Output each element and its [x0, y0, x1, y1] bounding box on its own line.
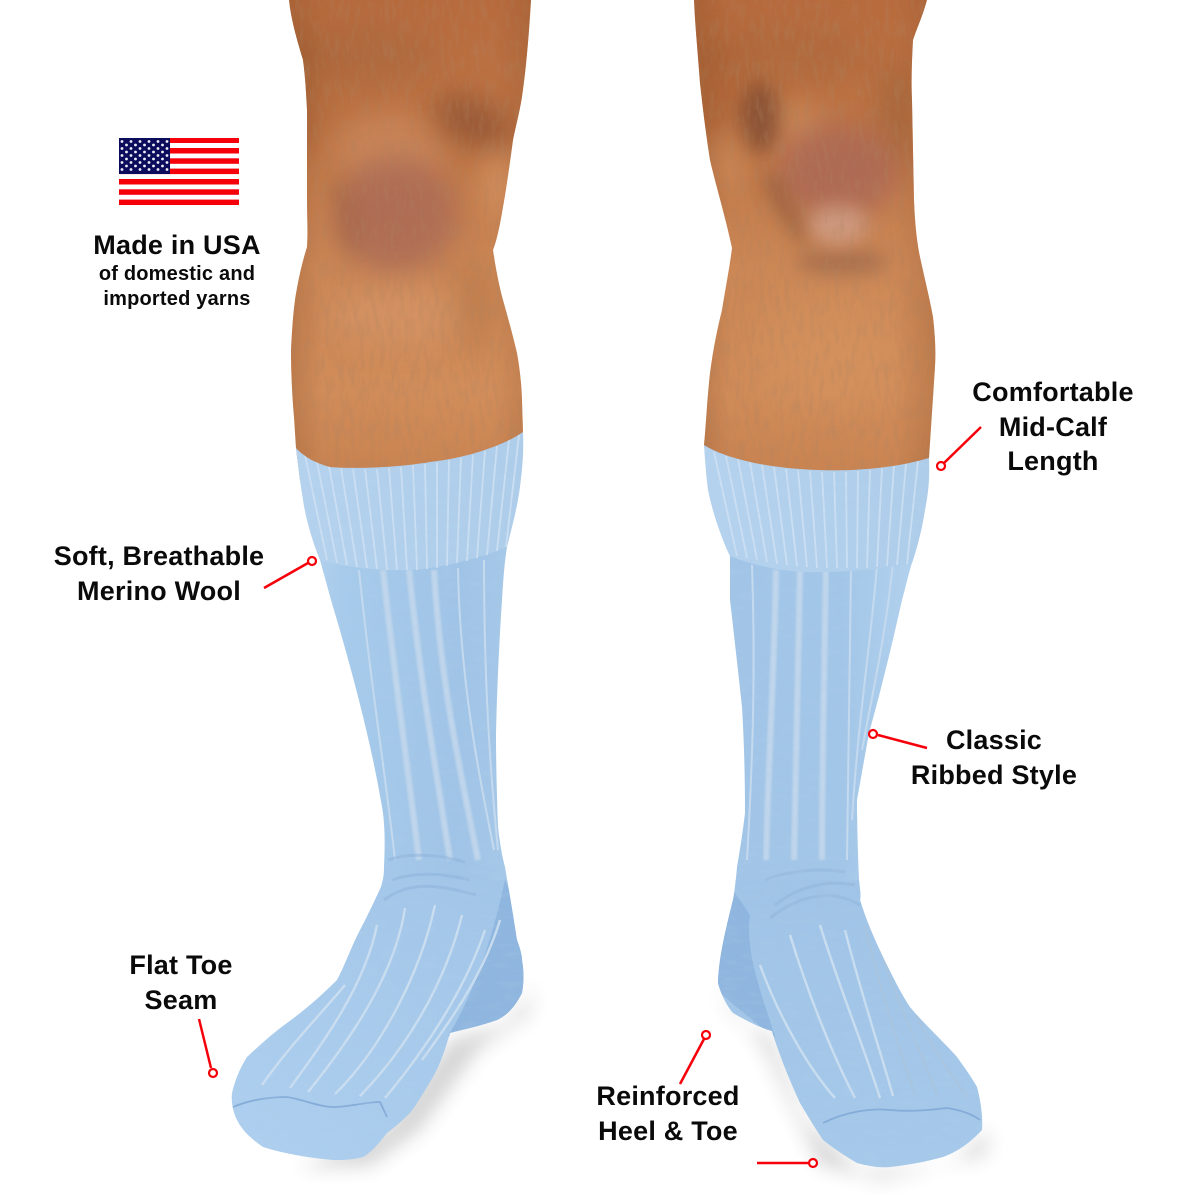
foot shadows [300, 975, 990, 1180]
ankle folds [384, 855, 476, 900]
callout: Classic Ribbed Style [869, 725, 1077, 790]
left leg [278, 0, 540, 490]
callout: Soft, Breathable Merino Wool: Merino Wool [77, 576, 241, 606]
cuff [700, 440, 940, 572]
toe seam [823, 1108, 980, 1123]
callout: Comfortable Mid-Calf Length: Mid-Calf [999, 412, 1108, 442]
callout: Flat Toe Seam [129, 950, 233, 1077]
heading: Made in USA [93, 230, 261, 310]
callout: Soft, Breathable Merino Wool [54, 541, 316, 606]
callout: Comfortable Mid-Calf Length: Length [1007, 446, 1099, 476]
heading: Made in USA: of domestic and [99, 263, 255, 285]
heading: Made in USA: Made in USA [93, 230, 261, 260]
heading: Made in USA: imported yarns [103, 288, 251, 310]
callout: Reinforced Heel & Toe [596, 1031, 817, 1167]
callout: Flat Toe Seam: Seam [145, 985, 217, 1015]
sock leg [723, 540, 919, 920]
foot ribs [262, 905, 500, 1098]
foot [710, 880, 990, 1170]
callout: Classic Ribbed Style: Ribbed Style [911, 760, 1077, 790]
left sock [225, 425, 530, 1170]
foot [225, 880, 530, 1170]
ribs [766, 570, 826, 860]
foot ribs [760, 925, 893, 1098]
sock leg [312, 540, 514, 920]
icon: US flag [119, 138, 239, 205]
toe seam [233, 1097, 387, 1117]
callout: Classic Ribbed Style: Classic [946, 725, 1042, 755]
callout: Flat Toe Seam: Flat Toe [129, 950, 233, 980]
callout: Reinforced Heel & Toe: Heel & Toe [598, 1116, 738, 1146]
ankle folds [765, 870, 860, 918]
right leg [690, 0, 940, 490]
callout: Soft, Breathable Merino Wool: Soft, Breathable [54, 541, 264, 571]
heel shade [448, 880, 530, 1036]
cuff [296, 432, 524, 570]
callout: Comfortable Mid-Calf Length: Comfortable [972, 377, 1134, 407]
right sock [700, 440, 990, 1170]
ribs [383, 570, 478, 860]
callout: Reinforced Heel & Toe: Reinforced [596, 1081, 740, 1111]
heel shade [716, 890, 775, 1036]
callout: Comfortable Mid-Calf Length [937, 377, 1134, 476]
